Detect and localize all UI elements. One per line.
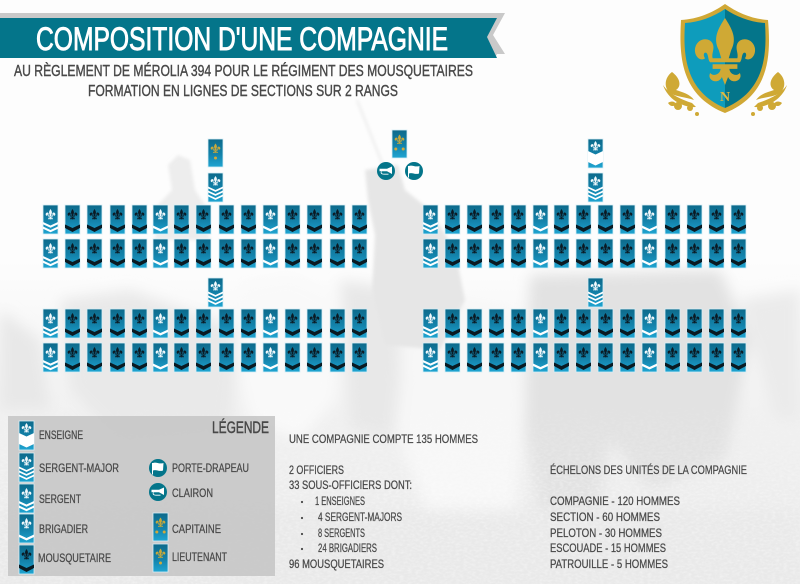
legend item: lieutenant bbox=[153, 544, 227, 572]
banner ribbon bbox=[0, 13, 505, 58]
legend item: porte-drapeau bbox=[149, 459, 249, 477]
text block: company breakdown bbox=[289, 432, 478, 571]
text block: unit echelons: ESCOUADE - 15 HOMMES bbox=[550, 541, 666, 555]
legend item: enseigne bbox=[19, 421, 83, 450]
legend item: brigadier bbox=[19, 514, 88, 543]
sergent-major: lower left section bbox=[208, 278, 223, 307]
text block: company breakdown: 1 ENSEIGNES bbox=[315, 494, 365, 508]
legend item: sergent bbox=[19, 484, 81, 513]
section: top left bbox=[43, 205, 367, 268]
subtitle: AU RÈGLEMENT DE MÉROLIA 394 POUR LE RÉGIMENT DES MOUSQUETAIRES bbox=[14, 63, 473, 80]
subtitle: FORMATION EN LIGNES DE SECTIONS SUR 2 RANGS bbox=[88, 83, 398, 100]
legend item: clairon bbox=[149, 483, 213, 501]
text block: unit echelons: PATROUILLE - 5 HOMMES bbox=[550, 557, 668, 571]
legend heading: LÉGENDE bbox=[212, 418, 269, 437]
legend item: sergent-major: SERGENT-MAJOR bbox=[39, 461, 119, 475]
command group: right enseigne and sergent-major bbox=[588, 139, 603, 202]
icon: crest shield with fleur-de-lis: N bbox=[720, 90, 730, 105]
text block: company breakdown: 33 SOUS-OFFICIERS DONT: bbox=[289, 478, 412, 492]
text block: company breakdown: 2 OFFICIERS bbox=[289, 463, 344, 477]
sergent-major: lower right section bbox=[588, 278, 603, 307]
section: bottom right bbox=[423, 309, 746, 372]
text block: unit echelons bbox=[550, 462, 747, 571]
section: bottom left bbox=[43, 309, 367, 372]
icon: left scroll ornament bbox=[663, 72, 699, 116]
legend item: capitaine: CAPITAINE bbox=[172, 522, 221, 536]
command group: captain, bugler, flag bearer bbox=[377, 130, 423, 180]
subtitle bbox=[14, 63, 473, 100]
legend item: clairon: CLAIRON bbox=[172, 486, 213, 500]
text block: unit echelons: COMPAGNIE - 120 HOMMES bbox=[550, 494, 680, 508]
text block: company breakdown: UNE COMPAGNIE COMPTE 135 HOMMES bbox=[289, 432, 478, 446]
text block: company breakdown: 24 BRIGADIERS bbox=[318, 541, 377, 555]
legend item: mousquetaire bbox=[19, 545, 111, 574]
legend item: sergent-major bbox=[19, 453, 119, 482]
text block: company breakdown: 4 SERGENT-MAJORS bbox=[318, 510, 402, 524]
text block: unit echelons: PELOTON - 30 HOMMES bbox=[550, 526, 662, 540]
legend item: capitaine bbox=[153, 513, 221, 541]
text block: unit echelons: ÉCHELONS DES UNITÉS DE LA COMPAGNIE bbox=[550, 462, 747, 477]
legend item: porte-drapeau: PORTE-DRAPEAU bbox=[172, 461, 249, 475]
icon: crest shield with fleur-de-lis bbox=[663, 4, 787, 116]
panel: legend bbox=[8, 416, 275, 576]
legend item: sergent: SERGENT bbox=[39, 492, 81, 506]
text block: company breakdown: 8 SERGENTS bbox=[318, 526, 365, 540]
legend item: mousquetaire: MOUSQUETAIRE bbox=[38, 551, 111, 565]
icon: right scroll ornament bbox=[751, 72, 787, 116]
command group: left lieutenant and sergent-major bbox=[208, 139, 223, 202]
title: COMPOSITION D'UNE COMPAGNIE bbox=[36, 21, 448, 57]
text block: company breakdown: 96 MOUSQUETAIRES bbox=[289, 557, 384, 571]
legend item: lieutenant: LIEUTENANT bbox=[172, 550, 227, 564]
legend item: brigadier: BRIGADIER bbox=[39, 522, 88, 536]
legend item: enseigne: ENSEIGNE bbox=[39, 428, 83, 442]
section: top right bbox=[423, 205, 746, 268]
text block: unit echelons: SECTION - 60 HOMMES bbox=[550, 510, 660, 524]
